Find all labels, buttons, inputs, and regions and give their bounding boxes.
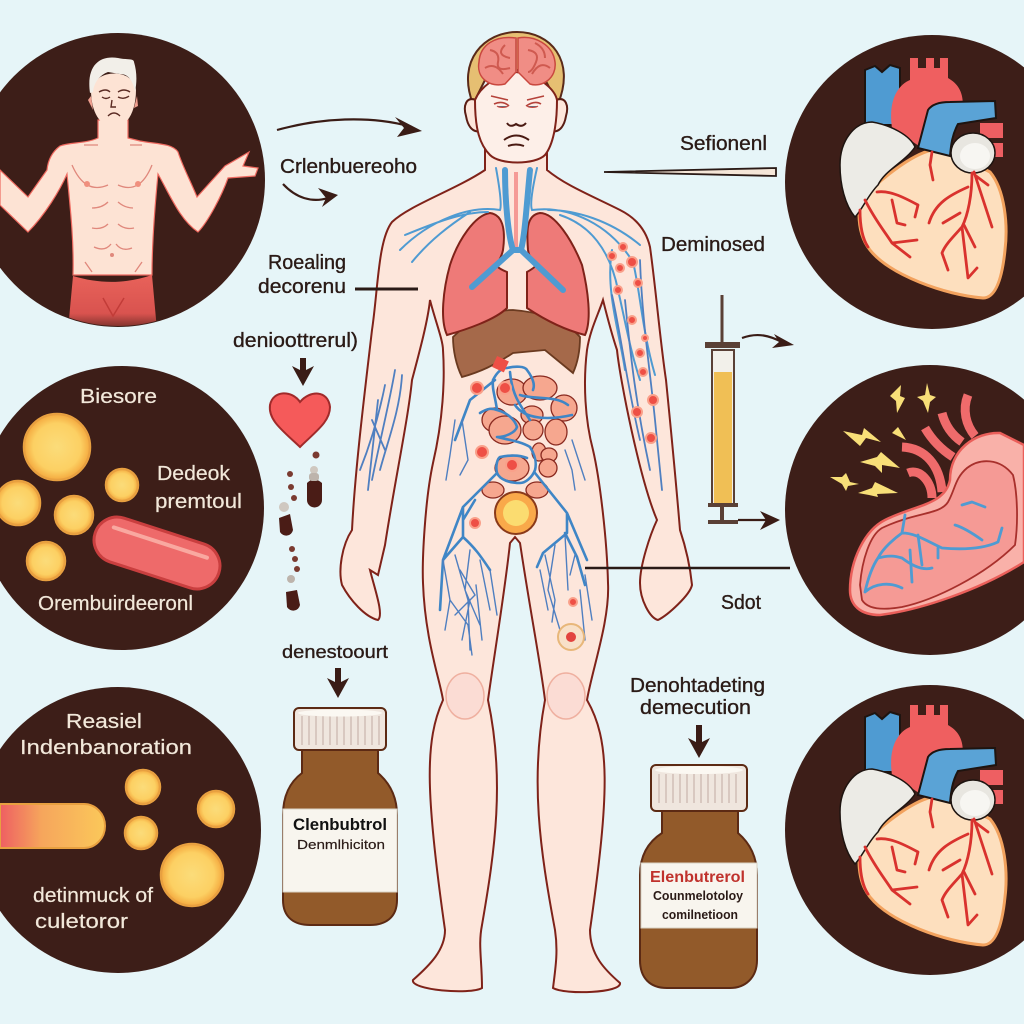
panel: heart top right (785, 35, 1024, 329)
capsule (88, 511, 226, 595)
label: heart: denioottrerul) (233, 330, 358, 352)
syringe (705, 295, 740, 522)
red spots (470, 243, 658, 606)
panel: heart bottom right (785, 685, 1024, 975)
label: bottle right second line: demecution (640, 697, 751, 719)
arrow: syringe lower (738, 511, 780, 530)
arrow: lower top left (283, 184, 338, 207)
arrow: down to heart (292, 358, 314, 386)
icons: sparks (830, 383, 936, 497)
label: Biesore (80, 386, 157, 408)
label subtext second line: comilnetioon (662, 907, 738, 922)
organ cluster (482, 376, 577, 498)
illustration: heart (840, 58, 1006, 298)
arrow: bottle right (688, 725, 710, 758)
icon: heart (270, 393, 330, 447)
arrow: bottle left (327, 668, 349, 698)
right knee (547, 673, 585, 719)
figure: man shrugging (0, 57, 258, 330)
lungs (443, 213, 589, 335)
label: premtoul (155, 491, 242, 513)
label: left: Roealing (268, 252, 346, 274)
label text: Clenbubtrol (293, 815, 387, 834)
label: top left: Crlenbuereoho (280, 156, 417, 178)
label: right: Deminosed (661, 234, 765, 256)
yellow organ (495, 492, 537, 534)
pills (125, 770, 234, 906)
label: bottle left: denestoourt (282, 642, 388, 662)
abdominal and leg vessels (440, 367, 587, 610)
label: Indenbanoration (20, 737, 192, 759)
panel: pills left (0, 366, 264, 650)
label: Reasiel (66, 711, 142, 733)
capsule (0, 804, 105, 848)
fine leg vessels (443, 420, 592, 655)
neck and chest vessels (400, 168, 655, 380)
leader line: left (355, 288, 418, 290)
label: culetoror (35, 911, 128, 933)
head (465, 32, 567, 162)
label: detinmuck of (33, 885, 153, 907)
illustration: heart (840, 705, 1006, 945)
label subtext: Counmelotoloy (653, 888, 744, 903)
panel: pills bottom left (0, 687, 261, 973)
label text: Elenbutrerol (650, 869, 745, 886)
label subtext: Denmlhiciton (297, 837, 385, 852)
airway (472, 170, 563, 290)
bottle left (283, 708, 397, 925)
arrow: top left (277, 117, 422, 137)
arrow: syringe upper (742, 334, 794, 348)
label: bottle right: Denohtadeting (630, 675, 765, 697)
panel: heart with lightning (785, 365, 1024, 655)
trachea (514, 172, 518, 247)
leader line: leg (585, 567, 790, 569)
sore spot (558, 624, 584, 650)
red marker (492, 356, 509, 372)
pills (0, 414, 138, 580)
label: leg: Sdot (721, 592, 761, 614)
body outline (340, 150, 692, 992)
central body figure (340, 32, 692, 992)
bottle right (640, 765, 757, 988)
liver (453, 310, 580, 377)
label: Dedeok (157, 463, 231, 485)
label: top right: Sefionenl (680, 133, 767, 155)
label: left second line: decorenu (258, 276, 346, 298)
illustration: enlarged heart (850, 395, 1024, 615)
panel: person with symptoms (0, 33, 265, 330)
arm vessels (360, 260, 662, 490)
left knee (446, 673, 484, 719)
label: Orembuirdeeronl (38, 593, 193, 615)
leader line: top right (604, 168, 776, 176)
icon: falling capsules (279, 452, 322, 611)
